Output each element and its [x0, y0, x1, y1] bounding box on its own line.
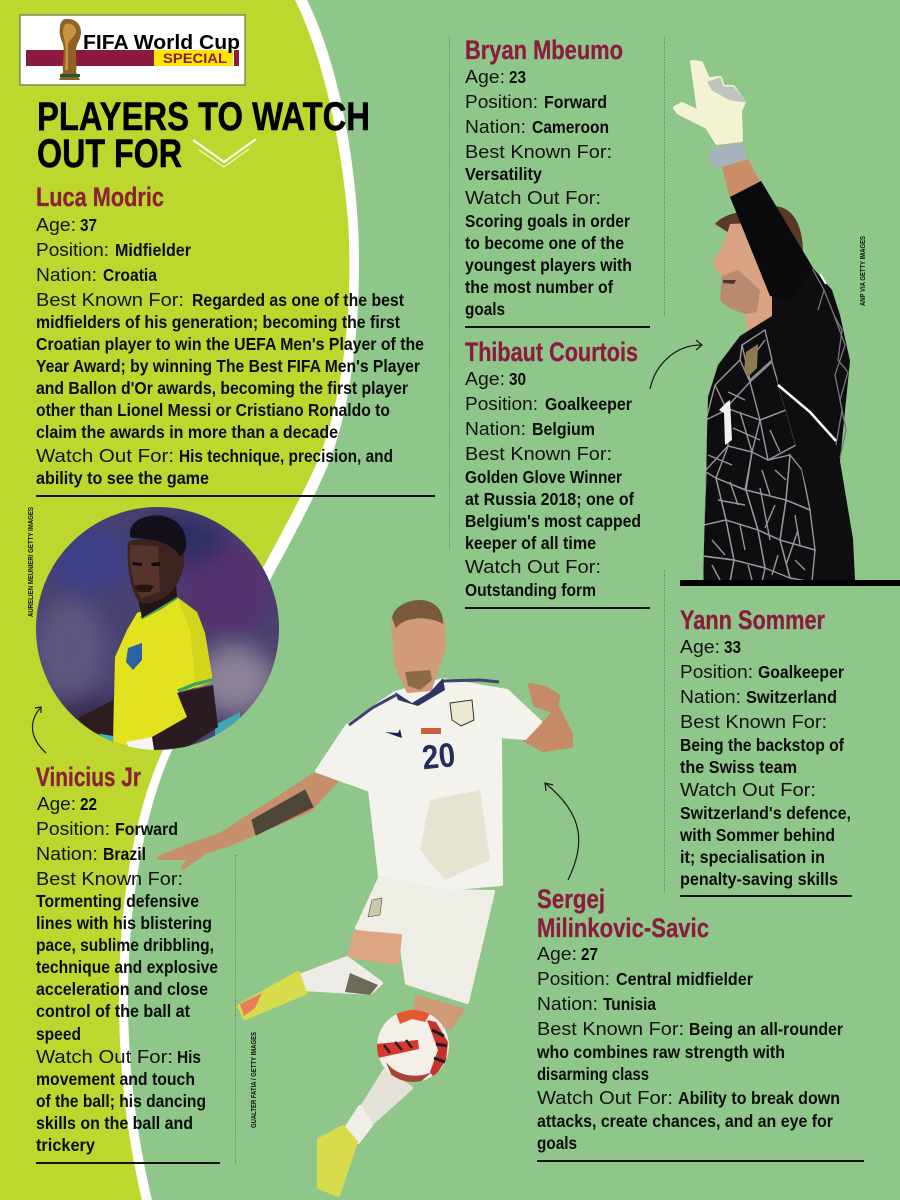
sleeve: [730, 181, 813, 300]
player details: goals: [465, 299, 505, 319]
wristband: [126, 737, 154, 750]
jersey number: [719, 400, 732, 445]
player details: Year Award; by winning The Best FIFA Men's Player: [36, 356, 420, 376]
photo background: [30, 500, 285, 755]
thigh left: [350, 932, 400, 963]
player details: Watch Out For:: [36, 446, 174, 466]
neck: [138, 584, 177, 618]
player details: Nation:: [36, 265, 97, 285]
player details: Watch Out For:: [465, 557, 601, 577]
player details: lines with his blistering: [36, 913, 212, 933]
player details: Croatian player to win the UEFA Men's Player of the: [36, 334, 424, 354]
player details: disarming class: [537, 1064, 649, 1084]
credit: Milinkovic-Savic photo: GUALTER FATIA / GETTY IMAGES: [249, 1032, 258, 1128]
arrow: to Milinkovic-Savic: [545, 783, 579, 880]
jersey white stripe: [778, 385, 836, 441]
player details: Scoring goals in order: [465, 211, 630, 231]
right boot: [319, 1127, 356, 1195]
heading: Sergej: [537, 884, 605, 914]
player details: who combines raw strength with: [536, 1042, 785, 1062]
player details: Best Known For:: [465, 444, 612, 464]
player details: Age:: [36, 215, 76, 235]
player details: Tunisia: [603, 994, 656, 1014]
player details: [465, 369, 641, 600]
left arm: [78, 700, 113, 736]
player details: control of the ball at: [36, 1001, 190, 1021]
crest: [450, 700, 474, 726]
player details: Position:: [680, 662, 753, 682]
panel: Bryan Mbeumo: [465, 35, 650, 328]
heading: Bryan Mbeumo: [465, 35, 623, 65]
jersey side pattern: [812, 268, 848, 458]
hair: [130, 515, 186, 556]
goalkeeper jersey: [703, 181, 855, 580]
left arm with tattoo: [159, 771, 336, 868]
player details: Croatia: [103, 265, 157, 285]
player details: of the ball; his dancing: [36, 1091, 206, 1111]
player details: penalty-saving skills: [680, 869, 838, 889]
panel: Luca Modric: [36, 182, 435, 497]
player details: Goalkeeper: [758, 662, 844, 682]
player details: Tormenting defensive: [36, 891, 199, 911]
player details: it; specialisation in: [680, 847, 825, 867]
heading: [537, 884, 709, 943]
player details: Switzerland's defence,: [680, 803, 851, 823]
player details: Belgium's most capped: [465, 511, 641, 531]
navy shoulder trim: [349, 680, 499, 725]
player details: Position:: [36, 819, 110, 839]
player details: youngest players with: [465, 255, 632, 275]
jersey: [113, 597, 213, 755]
player details: 27: [581, 944, 598, 964]
player details: with Sommer behind: [679, 825, 835, 845]
player details: technique and explosive: [36, 957, 218, 977]
player details: Best Known For:: [537, 1019, 684, 1039]
photo: Sergej Milinkovic-Savic: [159, 600, 571, 1195]
flags: [421, 728, 441, 734]
face: [713, 222, 790, 340]
player details: Age:: [465, 369, 505, 389]
credit: Vinicius photo: AURELIEN MEUNIER/ GETTY IMAGES: [26, 507, 35, 617]
face: [128, 539, 184, 603]
player details: 22: [80, 794, 97, 814]
credit: Courtois photo: ANP VIA GETTY IMAGES: [858, 236, 867, 306]
player details: [36, 215, 424, 488]
player details: Nation:: [36, 844, 98, 864]
player details: trickery: [36, 1135, 95, 1155]
player details: movement and touch: [36, 1069, 195, 1089]
player details: Forward: [115, 819, 178, 839]
player details: Best Known For:: [36, 290, 184, 310]
panel: Thibaut Courtois: [465, 337, 650, 609]
player details: Golden Glove Winner: [465, 467, 622, 487]
badge: FIFA World Cup Special: [20, 15, 245, 85]
player details: acceleration and close: [36, 979, 208, 999]
right arm: [525, 708, 571, 750]
player details: [679, 637, 851, 889]
jersey pattern: [703, 330, 815, 582]
player details: Age:: [537, 944, 577, 964]
photo: Thibaut Courtois: [675, 62, 855, 582]
crest: [126, 643, 142, 670]
heading: Vinicius Jr: [36, 762, 141, 792]
player details: goals: [537, 1133, 577, 1153]
photo: Vinicius Jr: [30, 500, 285, 755]
player details: the Swiss team: [680, 757, 797, 777]
player details: Nation:: [465, 117, 526, 137]
player details: Being an all-rounder: [689, 1019, 843, 1039]
player details: Position:: [465, 92, 538, 112]
knee and sock: [302, 958, 381, 993]
player details: claim the awards in more than a decade: [36, 422, 338, 442]
player details: Central midfielder: [616, 969, 753, 989]
player details: Nation:: [537, 994, 598, 1014]
player details: speed: [36, 1024, 81, 1044]
panel: Sergej Milinkovic-Savic: [536, 884, 864, 1162]
heading: Thibaut Courtois: [465, 337, 638, 367]
player details: Nation:: [465, 419, 526, 439]
hair: [715, 206, 803, 262]
panel: Vinicius Jr: [36, 762, 220, 1164]
collar and cuff: [141, 597, 213, 691]
lower leg sock: [362, 1070, 411, 1123]
player details: Age:: [37, 794, 76, 814]
player details: 37: [80, 215, 97, 235]
player details: Cameroon: [532, 117, 609, 137]
player details: Age:: [680, 637, 720, 657]
black base bar: [680, 580, 900, 586]
player details: Watch Out For:: [680, 780, 816, 800]
player details: [536, 944, 843, 1153]
player details: Position:: [36, 240, 109, 260]
player details: Watch Out For:: [537, 1088, 673, 1108]
title: [37, 95, 370, 176]
player details: other than Lionel Messi or Cristiano Ronaldo to: [36, 400, 390, 420]
hair: [392, 600, 443, 628]
player details: pace, sublime dribbling,: [36, 935, 214, 955]
heading: Milinkovic-Savic: [537, 913, 709, 943]
head: [393, 620, 444, 691]
player details: 33: [724, 637, 741, 657]
player details: Best Known For:: [36, 869, 183, 889]
player details: Best Known For:: [680, 712, 827, 732]
title: OUT FOR: [37, 132, 182, 176]
player details: Ability to break down: [678, 1088, 840, 1108]
player details: to become one of the: [465, 233, 624, 253]
panel: Yann Sommer: [679, 605, 852, 897]
player details: Nation:: [680, 687, 741, 707]
left boot: [239, 973, 305, 1018]
player details: and Ballon d'Or awards, becoming the first player: [36, 378, 408, 398]
player details: 30: [509, 369, 526, 389]
player details: Position:: [537, 969, 610, 989]
player details: Best Known For:: [465, 142, 612, 162]
heading: Yann Sommer: [680, 605, 825, 635]
player details: skills on the ball and: [36, 1113, 193, 1133]
player details: His: [177, 1047, 201, 1067]
player details: Switzerland: [746, 687, 837, 707]
player details: at Russia 2018; one of: [465, 489, 634, 509]
player details: Watch Out For:: [465, 188, 601, 208]
player details: His technique, precision, and: [179, 446, 393, 466]
badge: FIFA World Cup Special: SPECIAL: [163, 51, 227, 66]
player details: Midfielder: [115, 240, 191, 260]
title: PLAYERS TO WATCH: [37, 95, 370, 139]
heading: Luca Modric: [36, 182, 164, 212]
player details: the most number of: [465, 277, 613, 297]
background: white curve: [0, 0, 359, 1200]
puma logo: [385, 729, 402, 738]
arrow: to Courtois: [650, 340, 702, 389]
player details: Versatility: [465, 164, 542, 184]
wrist band: [709, 142, 747, 168]
player details: Age:: [465, 67, 505, 87]
football: [376, 1010, 449, 1084]
forearm: [722, 159, 761, 199]
player details: [36, 794, 218, 1155]
player details: 23: [509, 67, 526, 87]
crest: [744, 344, 758, 376]
player details: [465, 67, 632, 319]
player details: Position:: [465, 394, 538, 414]
player details: Being the backstop of: [680, 735, 844, 755]
player details: ability to see the game: [36, 468, 209, 488]
icon: World Cup trophy: [59, 19, 81, 80]
teal patches: [100, 734, 113, 742]
right arm: [152, 685, 218, 750]
player details: midfielders of his generation; becoming the first: [36, 312, 400, 332]
shirt: [317, 680, 540, 889]
shirt number 20: 20: [420, 736, 457, 777]
player details: Outstanding form: [465, 580, 596, 600]
player details: Forward: [544, 92, 607, 112]
glove: [675, 62, 746, 143]
dotted dividers: [236, 37, 664, 1165]
badge: FIFA World Cup Special: FIFA World Cup: [83, 32, 240, 54]
player details: keeper of all time: [465, 533, 596, 553]
player details: Regarded as one of the best: [192, 290, 404, 310]
arrow: to Vinicius photo: [32, 707, 46, 753]
player details: attacks, create chances, and an eye for: [537, 1111, 833, 1131]
player details: Watch Out For:: [36, 1047, 173, 1067]
icon: chevron: [193, 139, 256, 167]
player details: Goalkeeper: [545, 394, 632, 414]
background: lime shape: [0, 0, 349, 1200]
player details: Belgium: [532, 419, 595, 439]
shorts: [357, 878, 493, 1002]
player details: Brazil: [103, 844, 146, 864]
thigh right: [415, 997, 463, 1028]
